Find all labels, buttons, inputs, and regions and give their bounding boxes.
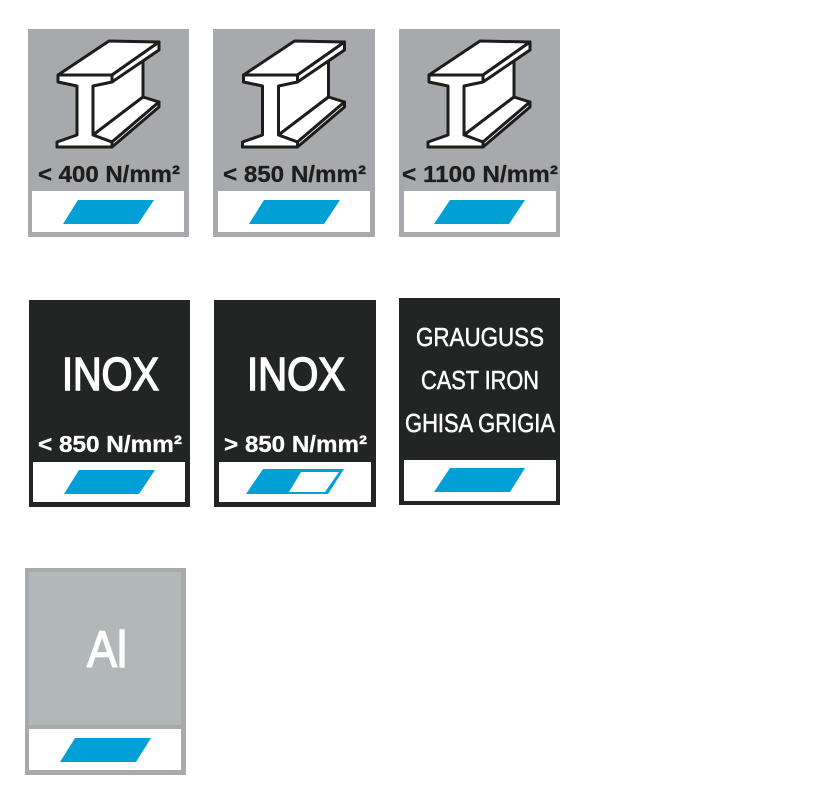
panel: stainless under 850 N/mm2 (29, 300, 190, 507)
icon: full blue bar (434, 468, 525, 492)
label: under 1100: < 1100 N/mm² (402, 161, 558, 187)
panel: steel under 850 N/mm2 (213, 29, 375, 237)
icon: full blue bar (434, 200, 525, 224)
heading: CAST IRON: CAST IRON (421, 365, 539, 395)
panel: steel under 400 N/mm2 (28, 29, 189, 237)
icon: steel I-beam (242, 41, 344, 147)
label: over 850: > 850 N/mm² (224, 431, 367, 457)
label: under 400: < 400 N/mm² (38, 161, 180, 187)
heading: Al: Al (87, 621, 127, 678)
icon: full blue bar (63, 200, 154, 224)
panel: steel under 1100 N/mm2 (399, 29, 560, 237)
icon: full blue bar (249, 200, 340, 224)
heading: INOX: INOX (247, 348, 345, 400)
heading: GHISA GRIGIA: GHISA GRIGIA (405, 408, 556, 438)
label: under 850: < 850 N/mm² (38, 431, 182, 457)
label: under 850: < 850 N/mm² (223, 161, 366, 187)
panel: stainless over 850 N/mm2 (214, 300, 376, 507)
heading: INOX: INOX (62, 348, 159, 400)
panel: aluminium (25, 568, 186, 775)
icon: full blue bar (64, 470, 155, 494)
heading: GRAUGUSS: GRAUGUSS (416, 322, 544, 352)
icon: full blue bar (60, 738, 151, 762)
panel: cast iron (399, 298, 560, 505)
icon: steel I-beam (57, 41, 159, 147)
icon: steel I-beam (428, 41, 530, 147)
icon: half blue bar (246, 469, 344, 494)
